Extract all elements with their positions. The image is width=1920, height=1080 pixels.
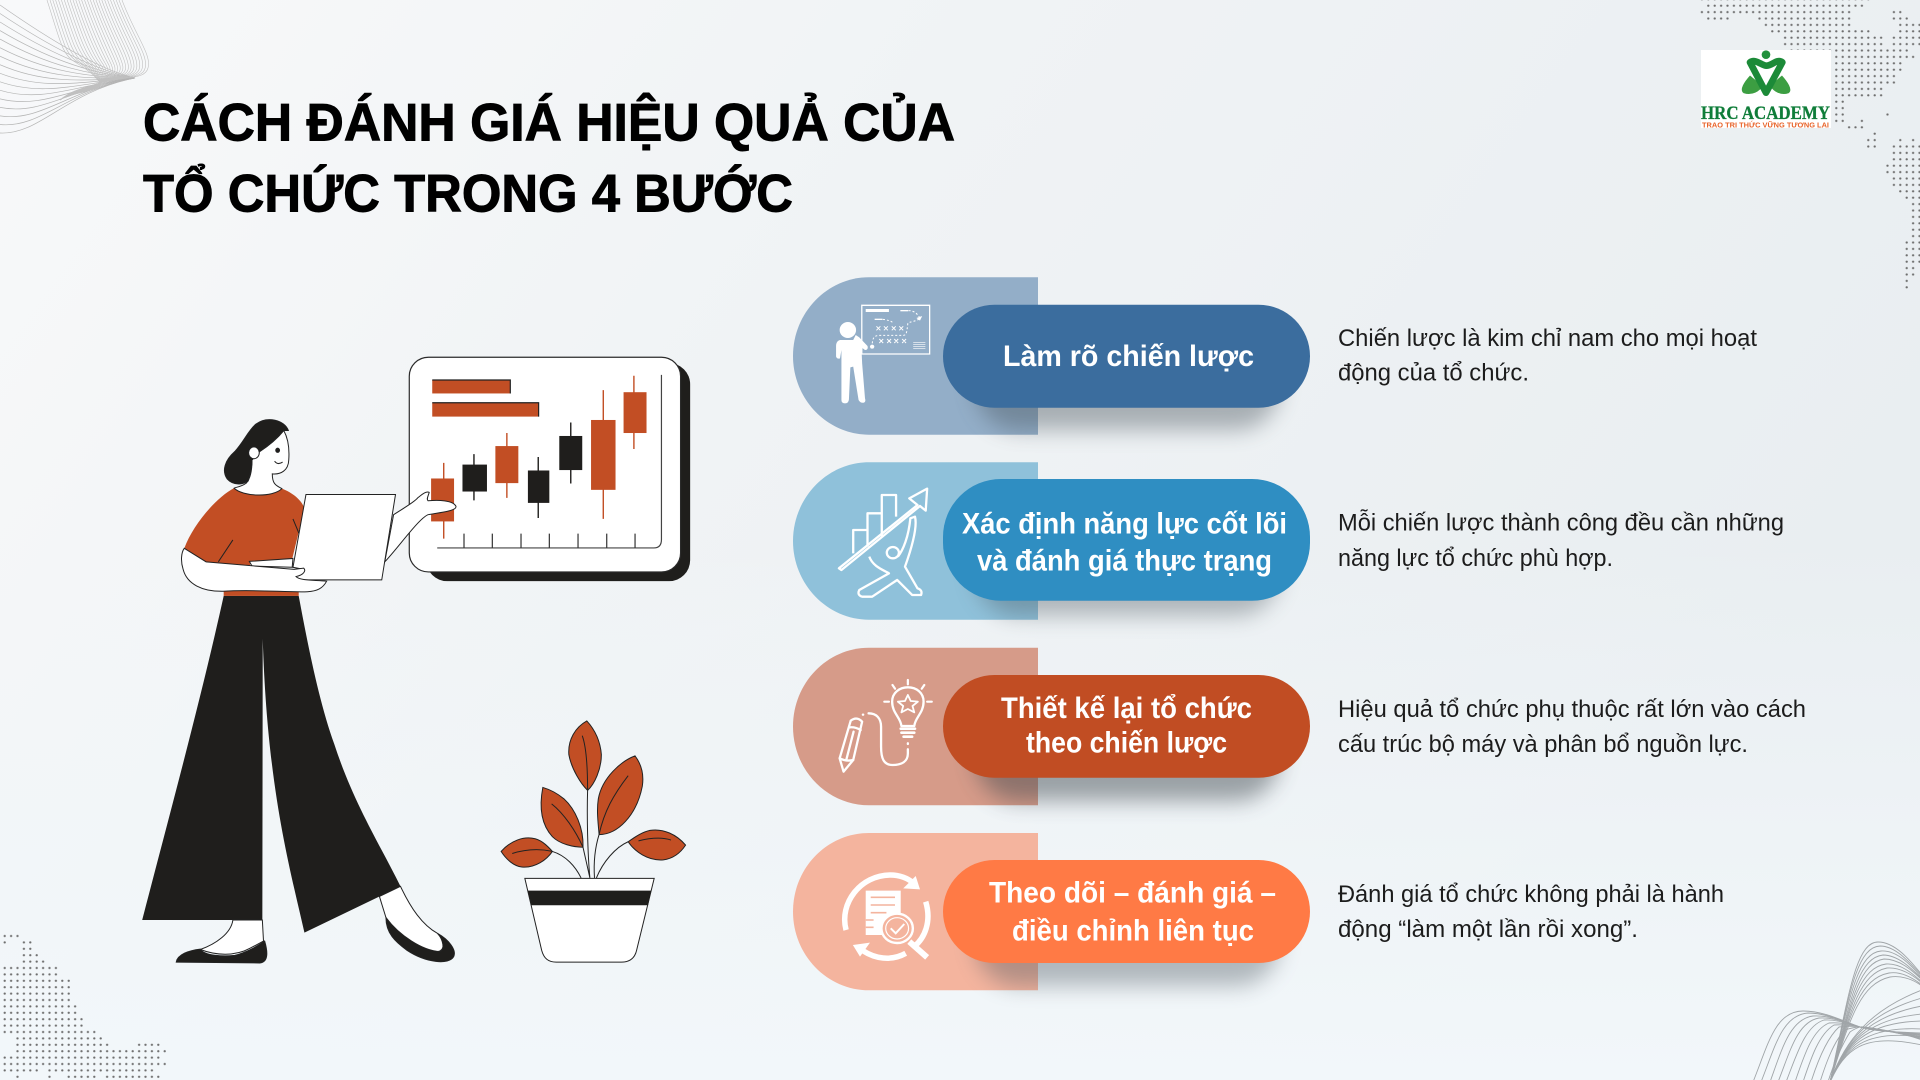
icon: strategist at board bbox=[836, 305, 930, 403]
plant bbox=[501, 721, 686, 962]
title: TỔ CHỨC TRONG 4 BƯỚC bbox=[143, 164, 793, 224]
icon: review cycle with magnifier bbox=[845, 875, 928, 958]
panel: step 4 bbox=[793, 833, 1310, 990]
logo: HRC Academy: TRAO TRI THỨC VỮNG TƯƠNG LAI bbox=[1702, 121, 1829, 130]
text block: step 4 description: động “làm một lần rồi xong”. bbox=[1338, 916, 1638, 943]
woman bbox=[142, 420, 456, 963]
step 4 backing block bbox=[793, 833, 1038, 990]
text block: step 1 description bbox=[1338, 325, 1757, 387]
step 3 heading: Thiết kế lại tổ chức bbox=[1001, 692, 1252, 725]
logo: HRC Academy: HRC ACADEMY bbox=[1701, 103, 1830, 124]
text block: step 3 description: Hiệu quả tổ chức phụ thuộc rất lớn vào cách bbox=[1338, 696, 1806, 723]
step 3 heading: theo chiến lược bbox=[1026, 727, 1227, 760]
step 4 heading: Theo dõi – đánh giá – bbox=[989, 877, 1276, 910]
icon: figure lifting growth arrow bbox=[839, 489, 927, 597]
step 4 heading bbox=[989, 877, 1276, 948]
step 2 backing block bbox=[793, 462, 1038, 620]
step 1 pill bbox=[943, 305, 1310, 408]
text block: step 3 description: cấu trúc bộ máy và phân bổ nguồn lực. bbox=[1338, 731, 1748, 758]
text block: step 3 description bbox=[1338, 696, 1806, 758]
panel: step 1 bbox=[793, 277, 1310, 435]
step 1 heading: Làm rõ chiến lược bbox=[1003, 340, 1254, 373]
text block: step 4 description bbox=[1338, 881, 1724, 943]
step 2 heading bbox=[962, 507, 1287, 578]
text block: step 1 description: Chiến lược là kim chỉ nam cho mọi hoạt bbox=[1338, 325, 1757, 352]
step 3 heading bbox=[1001, 692, 1252, 760]
step 3 backing block bbox=[793, 648, 1038, 805]
text block: step 2 description: năng lực tổ chức phù hợp. bbox=[1338, 545, 1613, 572]
decoration: top-right dotted map bbox=[1699, 0, 1920, 290]
chart board bbox=[409, 357, 690, 581]
text block: step 2 description: Mỗi chiến lược thành công đều cần những bbox=[1338, 510, 1784, 537]
title bbox=[143, 92, 955, 224]
text block: step 1 description: động của tổ chức. bbox=[1338, 360, 1529, 387]
step 4 heading: điều chỉnh liên tục bbox=[1012, 915, 1254, 948]
candlesticks bbox=[431, 376, 647, 539]
step 3 pill bbox=[943, 675, 1310, 778]
logo: HRC Academy bbox=[1701, 50, 1831, 130]
step 2 pill bbox=[943, 479, 1310, 601]
panel: step 3 bbox=[793, 648, 1310, 805]
icon: pencil and light bulb bbox=[840, 680, 932, 772]
icon: logo mark bbox=[1743, 50, 1789, 93]
step 1 backing block bbox=[793, 277, 1038, 435]
step 2 heading: Xác định năng lực cốt lõi bbox=[962, 507, 1287, 540]
text block: step 4 description: Đánh giá tổ chức không phải là hành bbox=[1338, 881, 1724, 908]
step 4 pill bbox=[943, 860, 1310, 963]
decoration: bottom-right wave lines bbox=[1753, 942, 1920, 1080]
text block: step 2 description bbox=[1338, 510, 1784, 572]
panel: step 2 bbox=[793, 462, 1310, 620]
decoration: bottom-left dotted map bbox=[2, 933, 168, 1080]
illustration: woman presenting chart beside a plant bbox=[142, 357, 690, 963]
title: CÁCH ĐÁNH GIÁ HIỆU QUẢ CỦA bbox=[143, 92, 955, 153]
decoration: top-left wave lines bbox=[0, 0, 149, 133]
step 2 heading: và đánh giá thực trạng bbox=[977, 545, 1272, 578]
